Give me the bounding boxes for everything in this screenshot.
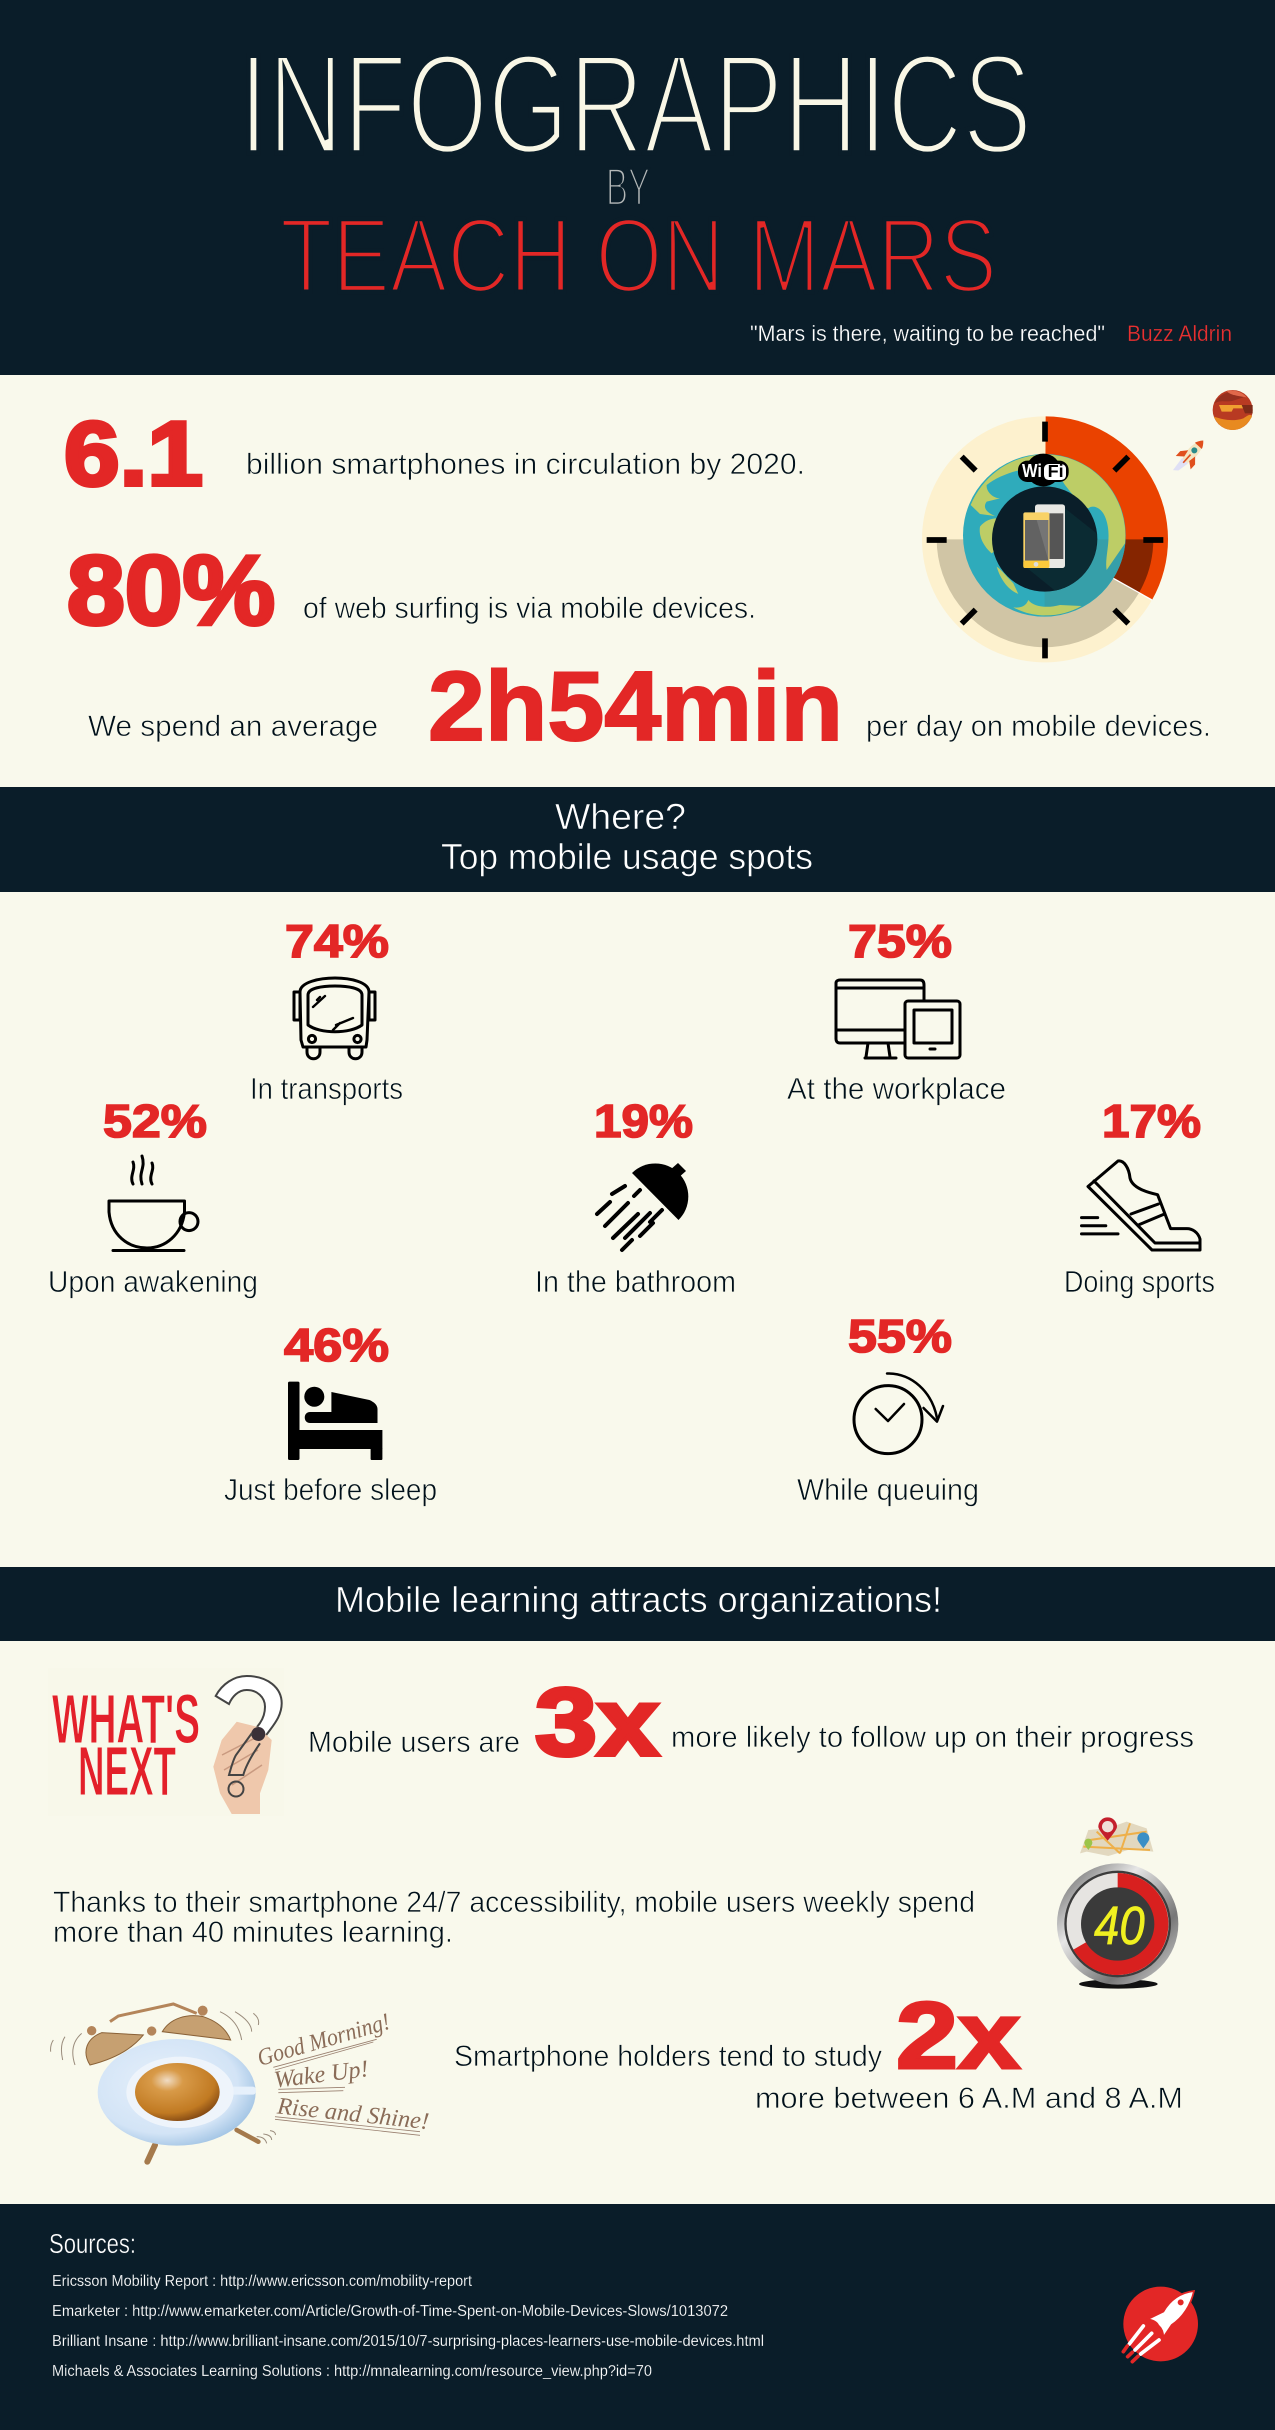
spot: while queuing bbox=[797, 1310, 979, 1507]
text: per day: per day on mobile devices. bbox=[866, 710, 1211, 743]
wifi logo: Fi bbox=[1048, 461, 1064, 481]
text: we spend: We spend an average bbox=[88, 710, 378, 743]
spot: in transports: 74% bbox=[285, 915, 389, 967]
source list: Emarketer : http://www.emarketer.com/Article/Growth-of-Time-Spent-on-Mobile-Devices-Slows/1013072 bbox=[52, 2303, 728, 2320]
donut clock chart with globe and phones bbox=[922, 390, 1253, 662]
icon: 40 minute stopwatch bbox=[1057, 1863, 1178, 1989]
text: billion smartphones: billion smartphones in circulation by 2020. bbox=[246, 448, 805, 481]
heading line: Top mobile usage spots: Top mobile usage spots bbox=[441, 836, 813, 877]
text: mobile users are: Mobile users are bbox=[308, 1726, 520, 1759]
spot: doing sports: 17% bbox=[1102, 1095, 1201, 1147]
quote author: Buzz Aldrin bbox=[1127, 321, 1232, 346]
source list: Brilliant Insane : http://www.brilliant-insane.com/2015/10/7-surprising-places-learners-use-mobile-devices.html bbox=[52, 2333, 764, 2350]
section heading: mobile learning bbox=[0, 1567, 1275, 1641]
image: what's next with hand and question mark: NEXT bbox=[78, 1732, 176, 1810]
icon: monitor and tablet bbox=[836, 980, 960, 1058]
heading line: Where?: Where? bbox=[555, 796, 686, 837]
text: more between: more between 6 A.M and 8 A.M bbox=[755, 2082, 1183, 2115]
clock ticks bbox=[927, 422, 1163, 658]
spot: in the bathroom: In the bathroom bbox=[535, 1264, 736, 1299]
icon: bed with sleeper bbox=[288, 1382, 382, 1460]
handwritten: good morning: Good Morning! bbox=[254, 2009, 393, 2072]
icon: coffee cup bbox=[109, 1156, 198, 1250]
text: thanks to their smartphone: Thanks to their smartphone 24/7 accessibility, mobile users weekly spend bbox=[53, 1886, 975, 1919]
stat: 2h54min: 2h54min bbox=[428, 651, 843, 761]
globe bbox=[963, 454, 1126, 617]
handwritten: wake up: Wake Up! bbox=[273, 2056, 370, 2094]
rocket bbox=[1168, 434, 1211, 479]
spot: upon awakening bbox=[48, 1095, 258, 1299]
spot: just before sleep: Just before sleep bbox=[224, 1472, 437, 1507]
stat: 80%: 80% bbox=[67, 535, 275, 645]
spot: just before sleep bbox=[224, 1319, 437, 1507]
icon: clock with arrow bbox=[854, 1373, 943, 1454]
spot: in transports: In transports bbox=[250, 1071, 403, 1106]
subtitle: BY: BY bbox=[606, 158, 650, 217]
text: thanks to their smartphone: more than 40 minutes learning. bbox=[53, 1916, 453, 1949]
spot: at the workplace: 75% bbox=[848, 915, 952, 967]
wifi logo bbox=[1018, 454, 1069, 486]
section heading: mobile learning: Mobile learning attracts organizations! bbox=[335, 1579, 942, 1620]
section heading: where bbox=[0, 787, 1275, 892]
spot: while queuing: 55% bbox=[848, 1310, 952, 1362]
text: more likely: more likely to follow up on their progress bbox=[671, 1721, 1194, 1754]
title: TEACH ON MARS: TEACH ON MARS bbox=[280, 197, 997, 315]
text: web surfing: of web surfing is via mobile devices. bbox=[303, 592, 756, 625]
image: what's next with hand and question mark: WHAT'S bbox=[52, 1680, 200, 1758]
footer panel: sources bbox=[0, 2204, 1275, 2430]
spot: at the workplace: At the workplace bbox=[787, 1071, 1006, 1106]
source list bbox=[52, 2273, 764, 2380]
stat: 3x: 3x bbox=[535, 1669, 659, 1776]
panel: mobile learning bbox=[0, 1641, 1275, 2204]
icon: shower bbox=[597, 1163, 688, 1250]
source list: Michaels & Associates Learning Solutions : http://mnalearning.com/resource_view.php?id=70 bbox=[52, 2363, 652, 2380]
image: coffee alarm clock with handwritten wake-up text bbox=[51, 2004, 430, 2162]
icon: map with pins bbox=[1080, 1817, 1153, 1856]
icon: 40 minute stopwatch: 40 bbox=[1094, 1897, 1145, 1956]
wifi logo: Wi bbox=[1022, 460, 1042, 481]
icon: bus bbox=[294, 978, 375, 1059]
heading: sources: Sources: bbox=[49, 2228, 136, 2259]
source list: Ericsson Mobility Report : http://www.ericsson.com/mobility-report bbox=[52, 2273, 473, 2290]
spot: in transports bbox=[250, 915, 403, 1106]
text: smartphone holders: Smartphone holders tend to study bbox=[454, 2040, 882, 2073]
spot: at the workplace bbox=[787, 915, 1006, 1106]
image: what's next with hand and question mark bbox=[48, 1668, 284, 1816]
spot: doing sports: Doing sports bbox=[1064, 1264, 1215, 1299]
icon: running shoe bbox=[1082, 1161, 1200, 1250]
spot: in the bathroom bbox=[535, 1095, 736, 1299]
text: thanks to their smartphone bbox=[53, 1886, 975, 1949]
panel: usage spots bbox=[0, 892, 1275, 1567]
spot: doing sports bbox=[1064, 1095, 1215, 1299]
quote: "Mars is there, waiting to be reached" bbox=[750, 321, 1105, 346]
phones bbox=[1023, 504, 1065, 568]
spot: just before sleep: 46% bbox=[284, 1319, 389, 1371]
planet mars bbox=[1213, 390, 1253, 430]
stat: 6.1: 6.1 bbox=[64, 404, 203, 505]
spot: upon awakening: Upon awakening bbox=[48, 1264, 258, 1299]
spot: while queuing: While queuing bbox=[797, 1472, 979, 1507]
spot: upon awakening: 52% bbox=[103, 1095, 207, 1147]
stat: 2x: 2x bbox=[896, 1983, 1020, 2089]
spot: in the bathroom: 19% bbox=[594, 1095, 693, 1147]
handwritten: rise and shine: Rise and Shine! bbox=[275, 2093, 430, 2135]
logo: rocket in red circle bbox=[1123, 2287, 1198, 2362]
header panel bbox=[0, 0, 1275, 375]
panel: key statistics bbox=[0, 375, 1275, 787]
